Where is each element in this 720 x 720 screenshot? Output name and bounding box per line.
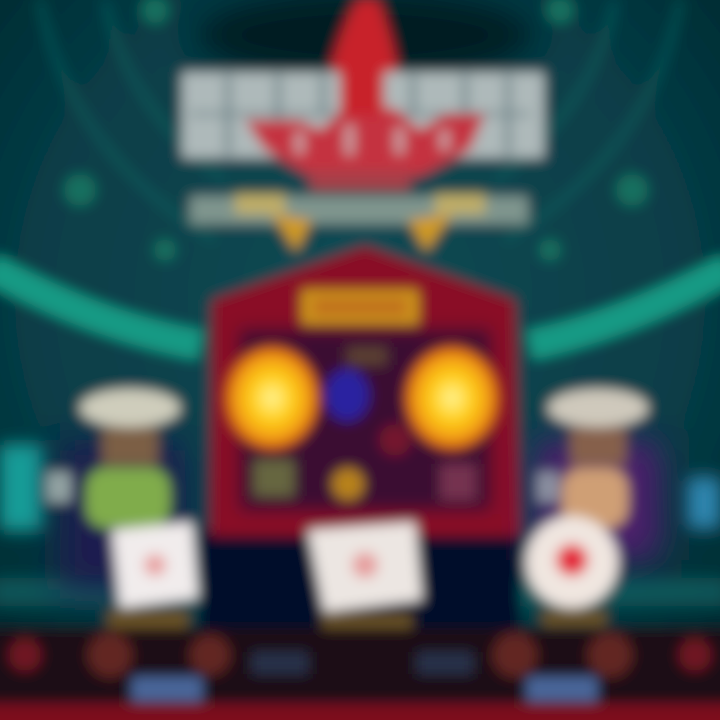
left body shadow — [60, 440, 185, 590]
right hat — [548, 389, 648, 427]
gold glow under cards — [108, 610, 606, 632]
teal light bands — [0, 268, 720, 345]
bottom counter — [0, 628, 720, 703]
title spire — [330, 0, 398, 75]
left green shirt — [86, 468, 170, 528]
title red lettering — [245, 108, 485, 176]
title block — [182, 60, 544, 176]
machine symbols row — [254, 347, 476, 500]
icon: blue center symbol — [325, 369, 369, 421]
left face — [102, 427, 158, 465]
card: left — [112, 522, 198, 608]
icon: left yellow light — [225, 346, 319, 450]
card: center — [308, 522, 422, 612]
left hat — [80, 389, 180, 427]
machine inner panel — [240, 330, 490, 510]
character: right — [535, 389, 660, 560]
right face — [570, 427, 626, 465]
character: left — [47, 389, 185, 590]
side teal glows — [0, 445, 720, 606]
background arcs — [40, 0, 680, 240]
gold sign — [302, 290, 418, 324]
dark top centre — [195, 0, 535, 80]
right shirt — [562, 468, 628, 528]
counter tokens — [9, 633, 711, 701]
subtitle — [190, 170, 528, 252]
dark base under machine — [200, 530, 520, 630]
panel: red slot machine — [210, 246, 520, 536]
chip: right — [526, 516, 618, 608]
right body shadow — [535, 440, 660, 560]
icon: right yellow light — [405, 346, 499, 450]
bottom red strip — [0, 704, 720, 720]
background stars — [64, 0, 648, 261]
